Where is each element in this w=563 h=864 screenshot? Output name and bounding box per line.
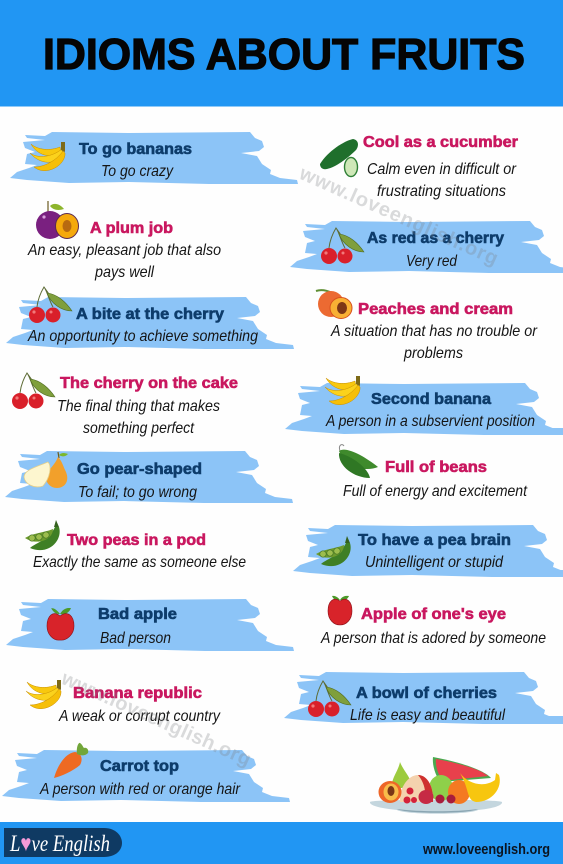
icon: cherries bbox=[12, 373, 55, 409]
text: peaches meaning: problems bbox=[403, 345, 463, 362]
watermark: www.loveenglish.org bbox=[57, 667, 254, 771]
panel: The cherry on the cake bbox=[12, 373, 238, 437]
icon: peach bbox=[316, 290, 352, 318]
icon: bananas bbox=[30, 142, 65, 171]
panel: To have a pea brain bbox=[293, 525, 563, 577]
text: plum job meaning: pays well bbox=[94, 264, 154, 281]
heading: Go pear-shaped: Go pear-shaped bbox=[77, 461, 202, 478]
text: cucumber meaning bbox=[367, 161, 517, 200]
text: cucumber meaning: Calm even in difficult or bbox=[367, 161, 517, 178]
text: cucumber meaning: frustrating situations bbox=[377, 183, 506, 200]
heading: Bad apple: Bad apple bbox=[98, 606, 177, 623]
heading: To have a pea brain: To have a pea brain bbox=[358, 532, 511, 549]
panel: Banana republic bbox=[26, 680, 221, 725]
illustration: fruit bowl bbox=[370, 757, 502, 814]
text: A person with red or orange hair: A person with red or orange hair bbox=[39, 781, 241, 798]
heading: Cool as a cucumber: Cool as a cucumber bbox=[363, 134, 518, 151]
icon: beans bbox=[339, 445, 378, 478]
heading: Banana republic: Banana republic bbox=[73, 685, 202, 702]
heading: The cherry on the cake: The cherry on the cake bbox=[60, 375, 238, 392]
logo: Love English: L♥ve English bbox=[9, 831, 110, 856]
panel: Peaches and cream bbox=[316, 290, 538, 362]
panel: A bite at the cherry bbox=[6, 287, 294, 349]
panel: To go bananas bbox=[10, 132, 298, 184]
heading: A bowl of cherries: A bowl of cherries bbox=[356, 685, 497, 702]
text: peaches meaning: A situation that has no trouble or bbox=[330, 323, 538, 340]
text: cherry on the cake meaning bbox=[57, 398, 220, 437]
text: A weak or corrupt country: A weak or corrupt country bbox=[58, 708, 221, 725]
panel: A bowl of cherries bbox=[284, 672, 563, 724]
panel: Go pear-shaped bbox=[5, 451, 293, 503]
text: A person in a subservient position: A person in a subservient position bbox=[325, 413, 535, 430]
panel: Carrot top bbox=[2, 743, 290, 802]
text: Full of energy and excitement: Full of energy and excitement bbox=[343, 483, 527, 500]
text: To fail; to go wrong: To fail; to go wrong bbox=[78, 484, 197, 501]
heading: Two peas in a pod: Two peas in a pod bbox=[67, 532, 206, 549]
icon: pea pod bbox=[316, 536, 351, 566]
icon: cucumber bbox=[320, 139, 358, 176]
heading: Peaches and cream: Peaches and cream bbox=[358, 301, 513, 318]
text: peaches meaning bbox=[330, 323, 538, 362]
text: Life is easy and beautiful: Life is easy and beautiful bbox=[350, 707, 505, 724]
icon: plum bbox=[36, 201, 78, 239]
text: An opportunity to achieve something: An opportunity to achieve something bbox=[27, 328, 258, 345]
panel: Cool as a cucumber bbox=[320, 134, 518, 200]
heading: As red as a cherry: As red as a cherry bbox=[367, 230, 504, 247]
heading: Second banana: Second banana bbox=[371, 391, 491, 408]
footer band bbox=[0, 822, 563, 864]
text: Bad person: Bad person bbox=[100, 630, 171, 647]
icon: bananas bbox=[26, 680, 61, 709]
text: plum job meaning: An easy, pleasant job that also bbox=[27, 242, 221, 259]
heading: A plum job: A plum job bbox=[90, 220, 173, 237]
heading: Full of beans: Full of beans bbox=[385, 459, 487, 476]
heading: Apple of one's eye: Apple of one's eye bbox=[361, 606, 506, 623]
icon: cherries bbox=[321, 228, 364, 264]
panel: As red as a cherry bbox=[290, 221, 563, 273]
icon: cherries bbox=[29, 287, 72, 323]
text: cherry on the cake meaning: something perfect bbox=[83, 420, 194, 437]
title: IDIOMS ABOUT FRUITS bbox=[43, 30, 525, 79]
text: Unintelligent or stupid: Unintelligent or stupid bbox=[365, 554, 504, 571]
panel: Full of beans bbox=[339, 445, 527, 500]
heading: Carrot top: Carrot top bbox=[100, 758, 179, 775]
icon: cherries bbox=[308, 681, 351, 717]
panel: Apple of one's eye bbox=[320, 596, 546, 647]
text: Exactly the same as someone else: Exactly the same as someone else bbox=[33, 554, 246, 571]
text: plum job meaning bbox=[27, 242, 221, 281]
panel: A plum job bbox=[27, 201, 221, 281]
panel: Two peas in a pod bbox=[25, 520, 246, 571]
icon: pea pod bbox=[25, 520, 60, 550]
icon: bananas bbox=[325, 376, 360, 405]
text: To go crazy: To go crazy bbox=[101, 163, 174, 180]
watermark: www.loveenglish.org bbox=[295, 162, 501, 270]
icon: carrot bbox=[54, 743, 88, 778]
panel: Bad apple bbox=[6, 599, 294, 651]
heading: To go bananas: To go bananas bbox=[79, 141, 192, 158]
icon: apple bbox=[47, 608, 74, 640]
panel: Second banana bbox=[285, 376, 563, 435]
header band bbox=[0, 0, 563, 106]
heading: A bite at the cherry: A bite at the cherry bbox=[76, 306, 224, 323]
text: cherry on the cake meaning: The final thing that makes bbox=[57, 398, 220, 415]
icon: pears bbox=[24, 452, 68, 488]
text: Very red: Very red bbox=[406, 253, 458, 270]
icon: apple bbox=[328, 596, 352, 625]
